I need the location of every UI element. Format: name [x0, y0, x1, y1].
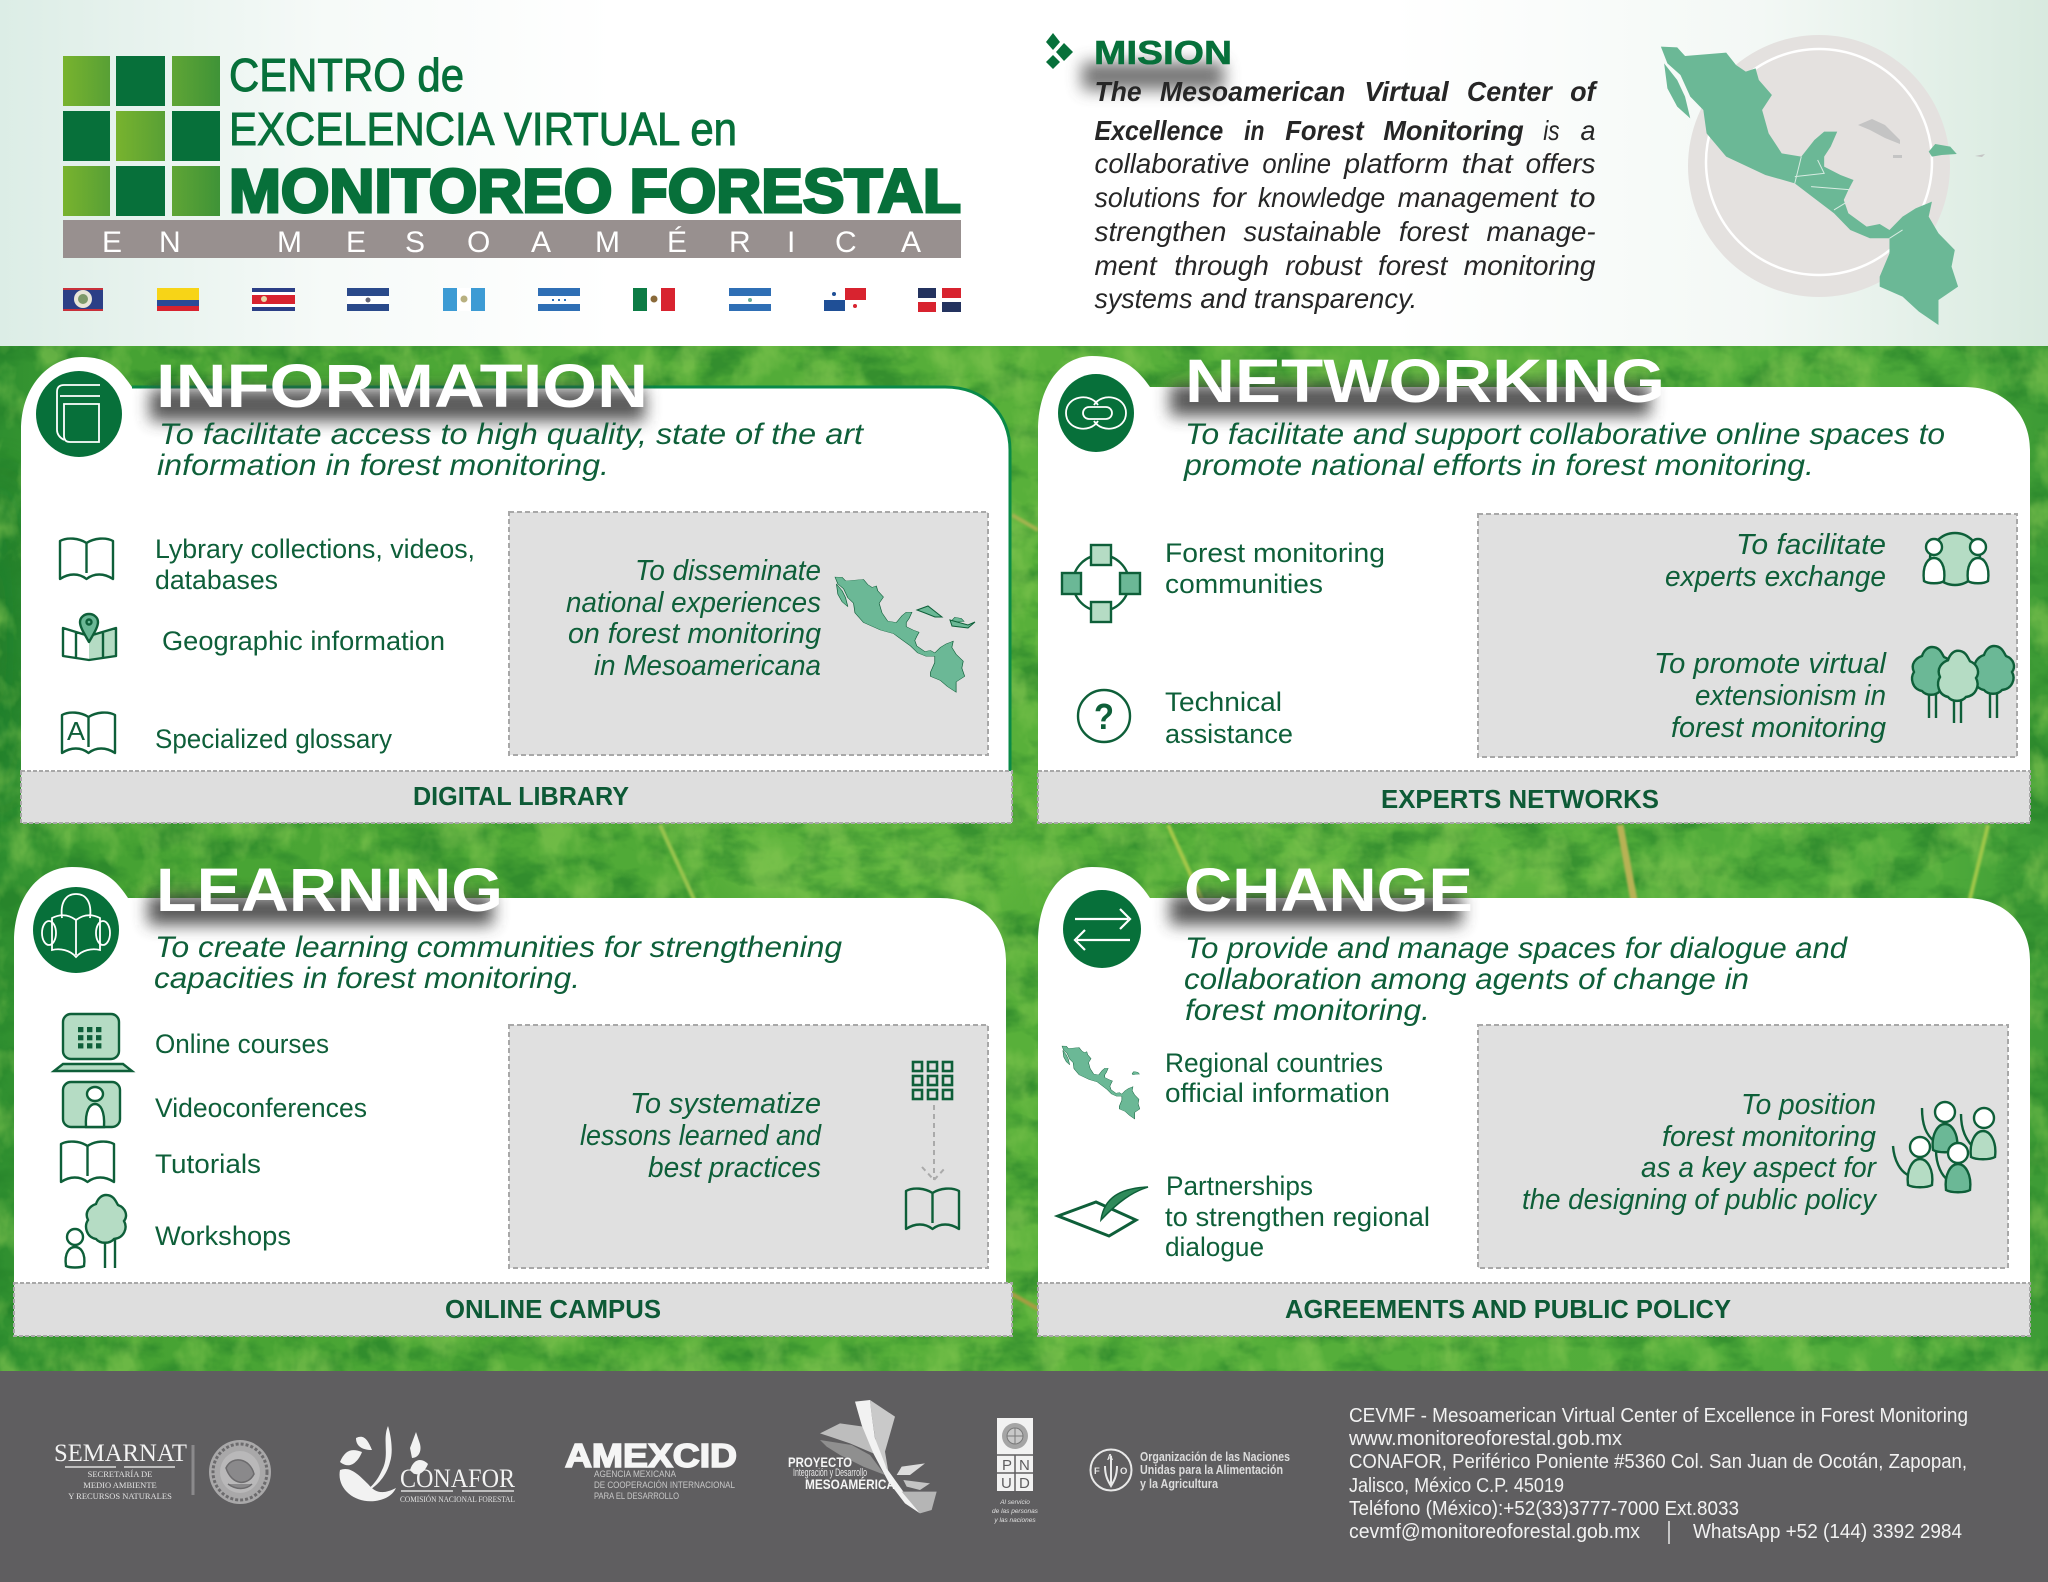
logo: PNUD: de las personas: [992, 1508, 1039, 1515]
mission paragraph: for: [1212, 182, 1248, 213]
panel: change: [1038, 856, 2030, 1336]
objective box: the designing of public policy: [1522, 1184, 1878, 1216]
heading shadow: [148, 895, 493, 925]
icon: arrows in circle: [1063, 890, 1141, 968]
leaf background: [0, 340, 2048, 1375]
contact information: CEVMF - Mesoamerican Virtual Center of Excellence in Forest Monitoring: [1349, 1405, 1968, 1427]
mission paragraph: that: [1462, 148, 1515, 179]
objective box: lessons learned and: [580, 1120, 822, 1152]
logo title: CENTRO de: [229, 49, 464, 101]
footer band: ONLINE CAMPUS: [445, 1296, 661, 1324]
mission paragraph: through: [1174, 250, 1269, 281]
description: [1184, 932, 1848, 1027]
panel background: [1038, 867, 2030, 1287]
item text: [1165, 1171, 1430, 1262]
logo title: MONITOREO FORESTAL: [229, 157, 961, 225]
objective box: To facilitate: [1736, 529, 1886, 561]
icon: open book: [60, 539, 113, 579]
panel: learning: [14, 856, 1012, 1336]
objective box: [1478, 514, 2017, 757]
item text: [1165, 538, 1385, 599]
footer band: [1038, 771, 2030, 823]
item text: Online courses: [155, 1029, 329, 1059]
logo: FAO: Organización de las Naciones: [1140, 1450, 1290, 1464]
objective box: To promote virtual: [1654, 648, 1887, 680]
mission paragraph: systems: [1095, 283, 1193, 314]
item text: Geographic information: [162, 626, 445, 656]
mission paragraph: transparency.: [1254, 283, 1417, 314]
logo: FAO: A: [1107, 1452, 1113, 1462]
mission paragraph: forest: [1399, 216, 1470, 247]
item text: [155, 534, 475, 595]
logo: Proyecto Mesoamérica: Integración y Desarrollo: [793, 1467, 867, 1479]
description: information in forest monitoring.: [157, 449, 609, 482]
logo: PNUD: P: [1002, 1457, 1012, 1474]
logo subtitle bar: en Mesoamérica: É: [667, 226, 687, 259]
logo: AMEXCID: AMEXCID: [565, 1437, 737, 1474]
item text: communities: [1165, 569, 1323, 599]
logo title: EXCELENCIA VIRTUAL en: [229, 103, 737, 155]
objective box: To disseminate: [635, 555, 821, 587]
icon: leaves: [820, 1400, 937, 1513]
icon: videoconference: [63, 1082, 120, 1127]
panel: networking: [1038, 347, 2030, 823]
mission paragraph: in: [1244, 115, 1264, 146]
icon: signed partnership: [1058, 1187, 1148, 1236]
logo: AMEXCID: DE COOPERACIÓN INTERNACIONAL: [594, 1480, 735, 1491]
mission paragraph: offers: [1526, 148, 1596, 179]
mesoamerica map with circle: [1661, 35, 1985, 325]
description: [157, 418, 865, 482]
objective box: national experiences: [566, 587, 821, 619]
objective box: To position: [1741, 1089, 1876, 1121]
item text: to strengthen regional: [1165, 1202, 1430, 1232]
heading: LEARNING: [156, 856, 503, 924]
footer band: [21, 771, 1012, 823]
item text: Videoconferences: [155, 1093, 367, 1123]
description: promote national efforts in forest monitoring.: [1183, 449, 1814, 482]
objective box: [1478, 1025, 2008, 1268]
item text: [1165, 1048, 1390, 1108]
mission paragraph: forest: [1378, 250, 1449, 281]
mission paragraph: knowledge: [1258, 182, 1385, 213]
mission paragraph: Forest: [1285, 115, 1365, 146]
logo subtitle bar: en Mesoamérica: C: [835, 226, 857, 259]
heading shadow: [150, 389, 645, 421]
mission paragraph: [1095, 76, 1598, 314]
logo: CONAFOR: COMISIÓN NACIONAL FORESTAL: [400, 1494, 515, 1504]
logo: SEMARNAT: MEDIO AMBIENTE: [83, 1480, 157, 1490]
logo: square grid: [63, 56, 220, 216]
footer band: DIGITAL LIBRARY: [413, 783, 629, 811]
item text: Regional countries: [1165, 1048, 1383, 1078]
icon: online computer: [54, 1014, 132, 1071]
mission paragraph: manage-: [1486, 216, 1596, 247]
contact information: [1348, 1405, 1968, 1544]
logo: FAO: y la Agricultura: [1140, 1477, 1219, 1491]
objective box: best practices: [648, 1152, 821, 1184]
logo subtitle bar: en Mesoamérica: A: [901, 226, 921, 259]
icon: books in circle: [36, 371, 122, 457]
item text: Specialized glossary: [155, 724, 392, 754]
item text: [1165, 687, 1293, 749]
contact information: www.monitoreoforestal.gob.mx: [1348, 1428, 1622, 1450]
icon: small map: [835, 577, 975, 692]
icon: small map: [1062, 1046, 1140, 1119]
mission paragraph: solutions: [1095, 182, 1201, 213]
objective box: forest monitoring: [1662, 1121, 1876, 1153]
logo: PNUD: Al servicio: [999, 1499, 1030, 1506]
logo subtitle bar: en Mesoamérica: S: [405, 226, 425, 259]
heading: CHANGE: [1184, 856, 1473, 924]
footer band: [1038, 1283, 2030, 1336]
logo title: [229, 49, 961, 225]
mission paragraph: a: [1581, 115, 1596, 146]
description: To provide and manage spaces for dialogue and: [1185, 932, 1848, 965]
item text: Forest monitoring: [1165, 538, 1385, 568]
logo: PNUD: U: [1001, 1475, 1012, 1492]
item text: Workshops: [155, 1221, 291, 1251]
panel background: [1038, 356, 2030, 775]
logo: Proyecto Mesoamérica: MESOAMÉRICA: [805, 1476, 895, 1492]
footer band: AGREEMENTS AND PUBLIC POLICY: [1285, 1296, 1731, 1324]
footer bar: [0, 1371, 2048, 1582]
item text: official information: [1165, 1078, 1390, 1108]
mission paragraph: Center: [1467, 76, 1554, 107]
item text: dialogue: [1165, 1232, 1264, 1262]
mission paragraph: Virtual: [1364, 76, 1449, 107]
header background: [0, 0, 2048, 346]
icon: workshop tree and person: [66, 1195, 126, 1268]
icon: glossary book: A: [67, 716, 86, 746]
mission heading: MISION: [1094, 34, 1232, 71]
logo: PNUD: y las naciones: [993, 1517, 1036, 1524]
description: collaboration among agents of change in: [1184, 963, 1749, 996]
icon: community ring: [1062, 545, 1140, 622]
mission paragraph: Mesoamerican: [1160, 76, 1345, 107]
objective box: [509, 1025, 988, 1268]
logo: PNUD: N: [1019, 1457, 1030, 1474]
icon: reader in circle: [33, 887, 119, 973]
logo: SEMARNAT: SECRETARÍA DE: [88, 1469, 152, 1479]
logo subtitle bar: en Mesoamérica: M: [595, 226, 620, 259]
mission paragraph: collaborative: [1095, 148, 1249, 179]
item text: Lybrary collections, videos,: [155, 534, 475, 564]
logo subtitle bar: en Mesoamérica: E: [346, 226, 366, 259]
description: To facilitate and support collaborative online spaces to: [1185, 418, 1945, 451]
icon: tutorial book: [61, 1142, 114, 1182]
objective box: To systematize: [630, 1088, 821, 1120]
icon: grid to book: [906, 1062, 959, 1229]
mission paragraph: ment: [1095, 250, 1158, 281]
logo subtitle bar: en Mesoamérica: E: [102, 226, 122, 259]
logo subtitle bar: en Mesoamérica: A: [531, 226, 551, 259]
logo: FAO: F: [1094, 1466, 1100, 1477]
icon: people group: [1893, 1102, 1995, 1192]
icon: question mark: [1078, 690, 1130, 742]
logo: SEMARNAT: SEMARNAT: [54, 1440, 187, 1467]
mission paragraph: monitoring: [1464, 250, 1596, 281]
mission paragraph: sustainable: [1243, 216, 1381, 247]
description: To create learning communities for strengthening: [155, 931, 842, 964]
mission paragraph: of: [1570, 76, 1598, 107]
mission paragraph: Excellence: [1095, 115, 1223, 146]
logo: SEMARNAT: Y RECURSOS NATURALES: [68, 1491, 172, 1501]
mission paragraph: online: [1262, 148, 1331, 179]
item text: Tutorials: [155, 1149, 261, 1179]
objective box: extensionism in: [1695, 680, 1886, 712]
mission paragraph: Monitoring: [1383, 115, 1524, 146]
item text: databases: [155, 565, 278, 595]
mission paragraph: strengthen: [1095, 216, 1226, 247]
panel background: [14, 867, 1006, 1287]
contact information: Teléfono (México):+52(33)3777-7000 Ext.8033: [1349, 1498, 1739, 1520]
description: capacities in forest monitoring.: [154, 962, 580, 995]
logo: SEMARNAT: [54, 1440, 271, 1504]
description: [154, 931, 842, 995]
objective box: as a key aspect for: [1641, 1152, 1877, 1184]
logo: FAO: O: [1120, 1466, 1127, 1477]
icon: mission diamonds: [1046, 33, 1073, 69]
logo: CONAFOR: [340, 1426, 516, 1504]
description: To facilitate access to high quality, state of the art: [159, 418, 865, 451]
item text: Technical: [1165, 687, 1282, 717]
logo subtitle bar: en Mesoamérica: [63, 220, 961, 259]
mission paragraph: is: [1543, 115, 1560, 146]
mission paragraph: management: [1398, 182, 1559, 213]
icon: plant: [340, 1426, 428, 1501]
logo subtitle bar: en Mesoamérica: O: [467, 226, 490, 259]
mission paragraph: robust: [1285, 250, 1364, 281]
icon: trees: [1912, 646, 2014, 723]
description: [1183, 418, 1945, 482]
objective box: forest monitoring: [1671, 712, 1886, 744]
icon: question mark: ?: [1094, 696, 1114, 737]
flags row: [63, 288, 961, 312]
logo subtitle bar: en Mesoamérica: I: [787, 226, 795, 259]
contact information: CONAFOR, Periférico Poniente #5360 Col. San Juan de Ocotán, Zapopan,: [1349, 1451, 1967, 1473]
logo: AMEXCID: [565, 1437, 737, 1502]
footer band: EXPERTS NETWORKS: [1381, 786, 1659, 814]
logo: PNUD: D: [1019, 1475, 1030, 1492]
logo: Proyecto Mesoamérica: [788, 1400, 937, 1513]
objective box: [509, 512, 988, 755]
footer band: [14, 1283, 1012, 1336]
mission paragraph: The: [1095, 76, 1142, 107]
heading shadow: [1170, 384, 1650, 416]
objective box: experts exchange: [1665, 561, 1886, 593]
panel: information: [21, 352, 1012, 823]
objective box: on forest monitoring: [568, 618, 821, 650]
logo subtitle bar: en Mesoamérica: N: [159, 226, 181, 259]
logo: PNUD: [992, 1418, 1039, 1524]
contact information: WhatsApp +52 (144) 3392 2984: [1693, 1521, 1962, 1543]
heading: INFORMATION: [156, 352, 648, 420]
item text: Partnerships: [1166, 1171, 1313, 1201]
logo: FAO: [1090, 1450, 1290, 1491]
mission paragraph: to: [1569, 182, 1596, 213]
mission heading: [1046, 33, 1232, 90]
logo: Proyecto Mesoamérica: PROYECTO: [788, 1454, 852, 1470]
logo: AMEXCID: PARA EL DESARROLLO: [594, 1491, 679, 1502]
mission paragraph: platform: [1343, 148, 1449, 179]
heading: NETWORKING: [1185, 347, 1665, 415]
icon: experts exchange: [1924, 533, 1988, 585]
logo: CONAFOR: CONAFOR: [400, 1464, 516, 1493]
icon: links in circle: [1058, 374, 1134, 452]
item text: assistance: [1165, 719, 1293, 749]
panel background: [21, 357, 1010, 775]
description: forest monitoring.: [1185, 994, 1430, 1027]
contact information: cevmf@monitoreoforestal.gob.mx: [1349, 1521, 1640, 1543]
objective box: in Mesoamericana: [594, 650, 821, 682]
mission paragraph: and: [1200, 283, 1247, 314]
logo subtitle bar: en Mesoamérica: R: [729, 226, 751, 259]
logo: AMEXCID: AGENCIA MEXICANA: [594, 1469, 677, 1480]
contact information: Jalisco, México C.P. 45019: [1349, 1475, 1564, 1497]
icon: map pin: [63, 614, 116, 660]
heading shadow: [1170, 895, 1462, 925]
icon: national seal: [209, 1440, 271, 1504]
logo: FAO: Unidas para la Alimentación: [1140, 1463, 1283, 1477]
logo subtitle bar: en Mesoamérica: M: [277, 226, 302, 259]
icon: glossary book: [62, 713, 115, 753]
